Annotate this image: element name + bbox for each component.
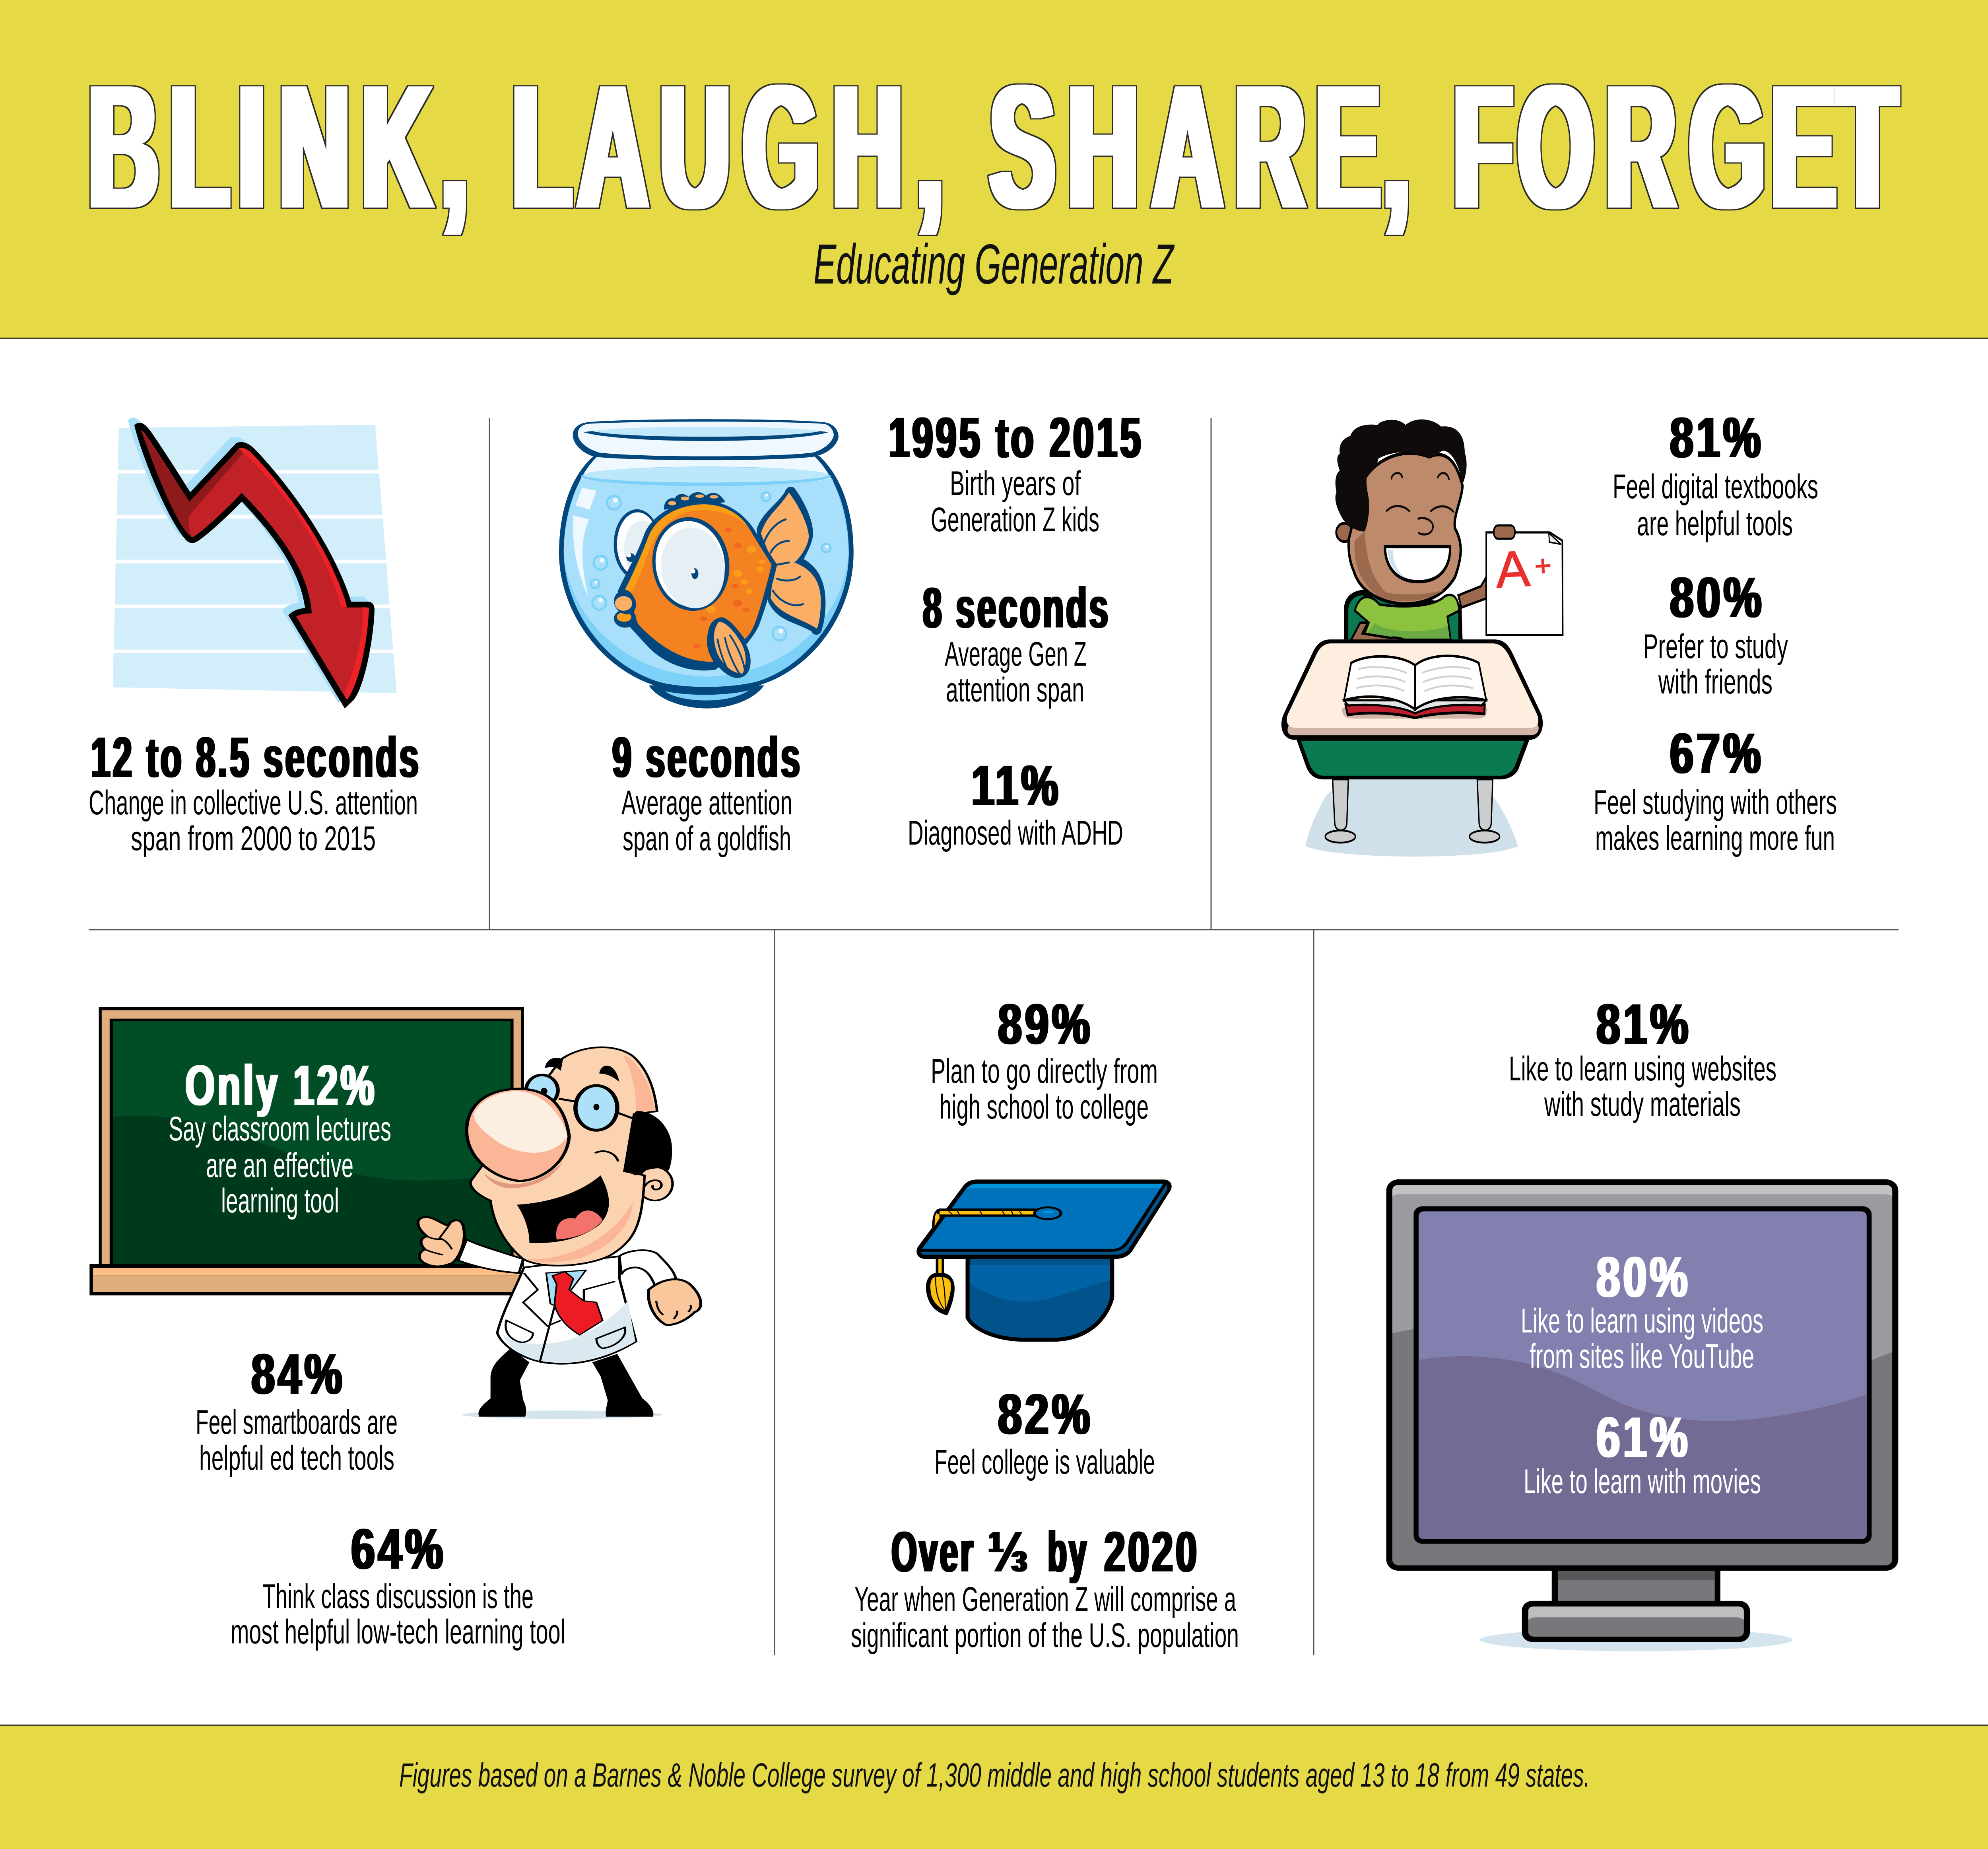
stat: 82% college valuable: 82% <box>998 1382 1093 1446</box>
stat: 8 seconds <box>923 576 1110 709</box>
stat: 81% websites: 81% <box>1596 992 1691 1056</box>
stat: 89% college <box>931 992 1158 1126</box>
stat: 9 seconds: span of a goldfish <box>623 820 791 858</box>
panel: college plans <box>851 992 1239 1655</box>
monitor text: 80% videos: Like to learn using videos <box>1521 1302 1763 1340</box>
stat: 64% class discussion: Think class discussion is the <box>262 1577 534 1616</box>
stat: 64% class discussion: 64% <box>351 1517 446 1581</box>
illustration: chalkboard <box>89 1007 524 1295</box>
monitor text: 80% videos: from sites like YouTube <box>1530 1337 1754 1375</box>
stat: 89% college: Plan to go directly from <box>931 1052 1158 1090</box>
stat: 67% studying with others: makes learning more fun <box>1595 819 1835 857</box>
stat: 67% studying with others: Feel studying with others <box>1594 783 1837 822</box>
monitor text: 61% movies <box>1524 1405 1761 1501</box>
icon: graduation cap <box>916 1179 1172 1342</box>
panel: goldfish <box>559 406 1143 858</box>
stat: over one third by 2020: by <box>1048 1520 1089 1584</box>
monitor text: 80% videos: 80% <box>1596 1245 1691 1309</box>
stat: 1995 to 2015 <box>889 406 1143 539</box>
stat: 84% smartboards: 84% <box>251 1342 345 1406</box>
stat: 67% studying with others: 67% <box>1670 721 1764 785</box>
stat: 80% study with friends <box>1643 565 1788 701</box>
stat: 9 seconds: 9 seconds <box>612 725 802 789</box>
stat: 80% study with friends: Prefer to study <box>1643 627 1788 666</box>
monitor text: 80% videos <box>1521 1245 1763 1375</box>
stat: over one third by 2020: significant portion of the U.S. population <box>851 1616 1239 1655</box>
chalkboard text: Only 12% <box>185 1053 377 1117</box>
monitor text: 61% movies: Like to learn with movies <box>1524 1462 1761 1501</box>
stat: 12 to 8.5 seconds: Change in collective U.S. attention <box>89 784 418 822</box>
stat: 89% college: 89% <box>998 992 1093 1056</box>
icon: falling arrow on chart paper <box>113 420 397 704</box>
panel: attention decline <box>89 420 421 858</box>
stat: over one third by 2020: Over <box>891 1520 975 1584</box>
stat: 81% digital textbooks: are helpful tools <box>1637 505 1793 543</box>
stat: 89% college: high school to college <box>940 1088 1149 1126</box>
icon: student at desk holding A+ paper <box>1281 420 1563 857</box>
illustration: professor <box>418 1047 701 1419</box>
stat: 81% websites <box>1509 992 1776 1123</box>
stat: 1995 to 2015: Birth years of <box>950 464 1081 503</box>
stat: 81% digital textbooks <box>1613 406 1818 543</box>
stat: 80% study with friends: with friends <box>1658 663 1773 701</box>
footer band <box>0 1725 1988 1849</box>
stat: 11% <box>908 754 1123 852</box>
stat: over one third by 2020: 2020 <box>1104 1520 1200 1584</box>
stat: 64% class discussion <box>231 1517 565 1651</box>
stat: 8 seconds: attention span <box>946 671 1084 709</box>
stat: 67% studying with others <box>1594 721 1837 857</box>
paper grade: + <box>1534 550 1552 582</box>
title: BLINK, LAUGH, SHARE, FORGET <box>89 48 1897 245</box>
stat: 82% college valuable <box>934 1382 1155 1481</box>
stat: 84% smartboards <box>196 1342 398 1477</box>
stat: 1995 to 2015: Generation Z kids <box>931 501 1099 539</box>
icon: computer monitor <box>1386 1179 1898 1651</box>
chalkboard text <box>169 1053 391 1220</box>
icon: goldfish in bowl <box>559 419 854 709</box>
stat: 9 seconds <box>612 725 802 858</box>
stat: 12 to 8.5 seconds <box>89 725 421 858</box>
stat: 11%: 11% <box>971 754 1061 818</box>
stat: over one third by 2020: ⅓ <box>988 1520 1031 1584</box>
stat: 1995 to 2015: 1995 to 2015 <box>889 406 1143 470</box>
stat: 64% class discussion: most helpful low-tech learning tool <box>231 1613 565 1651</box>
stat: 81% websites: with study materials <box>1544 1085 1741 1123</box>
stat: 12 to 8.5 seconds: 12 to 8.5 seconds <box>91 725 421 789</box>
stat: 9 seconds: Average attention <box>621 784 792 822</box>
paper grade: A <box>1494 540 1532 598</box>
stat: 80% study with friends: 80% <box>1670 565 1765 629</box>
stat: 81% digital textbooks: 81% <box>1670 406 1764 470</box>
stat: 8 seconds: Average Gen Z <box>945 635 1087 673</box>
stat: 81% websites: Like to learn using websites <box>1509 1050 1776 1088</box>
chalkboard text: are an effective <box>206 1146 353 1185</box>
stat: 82% college valuable: Feel college is valuable <box>934 1443 1155 1481</box>
panel: online learning <box>1386 992 1898 1651</box>
stat: 81% digital textbooks: Feel digital textbooks <box>1613 468 1818 506</box>
stat: over one third by 2020: Year when Generation Z will comprise a <box>854 1580 1236 1618</box>
stat: over one third by 2020 <box>851 1520 1239 1655</box>
stat: 12 to 8.5 seconds: span from 2000 to 2015 <box>131 820 376 858</box>
stat: 8 seconds: 8 seconds <box>923 576 1110 640</box>
subtitle: Educating Generation Z <box>813 233 1175 296</box>
chalkboard text: learning tool <box>221 1182 339 1220</box>
panel: classroom lectures <box>89 1007 701 1651</box>
stat: 84% smartboards: Feel smartboards are <box>196 1403 398 1441</box>
header band <box>0 0 1988 339</box>
stat: 84% smartboards: helpful ed tech tools <box>199 1439 394 1477</box>
chalkboard text: Say classroom lectures <box>169 1110 391 1148</box>
stat: 11%: Diagnosed with ADHD <box>908 814 1123 852</box>
panel: student study habits <box>1281 406 1837 857</box>
monitor text: 61% movies: 61% <box>1596 1405 1691 1469</box>
